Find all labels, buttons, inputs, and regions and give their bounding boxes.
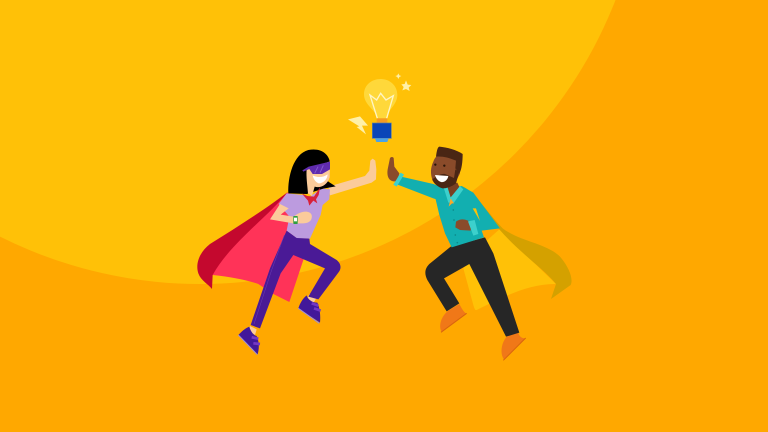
character: man superhero (387, 147, 572, 360)
man bent arm and fist (455, 208, 480, 236)
man eyes (434, 163, 445, 167)
man face (431, 154, 460, 187)
icon: large star (401, 80, 411, 91)
man smile (435, 175, 448, 182)
bulb glass (364, 79, 397, 118)
man beard (432, 169, 459, 188)
man teal shirt (435, 186, 500, 247)
woman smile (313, 174, 328, 183)
woman bent arm and fist (270, 204, 312, 223)
bulb filament (370, 93, 393, 118)
woman sunglasses (302, 162, 330, 174)
man extended arm and hand (387, 157, 448, 201)
man front shoe (502, 333, 526, 360)
woman extended arm and hand (328, 159, 376, 195)
woman hair (288, 149, 336, 194)
character: woman superhero (197, 149, 376, 355)
woman watch (293, 216, 298, 224)
woman face (306, 161, 330, 196)
woman back foot and shoe (298, 294, 321, 323)
man back shoe (440, 304, 467, 332)
woman purple leggings (251, 231, 341, 328)
woman legging seam (254, 235, 284, 324)
bulb base cap (375, 138, 389, 142)
man black trousers (425, 237, 519, 337)
bulb collar (377, 118, 387, 124)
woman lilac shirt (279, 188, 330, 239)
woman front foot and shoe (238, 326, 260, 355)
man neck and collar (444, 183, 463, 207)
icon: light bulb idea (348, 73, 411, 142)
man cape (462, 186, 572, 310)
woman cape (197, 192, 317, 302)
man shirt buttons (452, 209, 458, 243)
icon: lightning bolt (348, 116, 368, 134)
background: large yellow circle (0, 0, 646, 284)
icon: small star (395, 73, 401, 79)
woman red scarf (302, 187, 320, 206)
bulb blue base (372, 123, 391, 138)
man hair (436, 147, 463, 173)
